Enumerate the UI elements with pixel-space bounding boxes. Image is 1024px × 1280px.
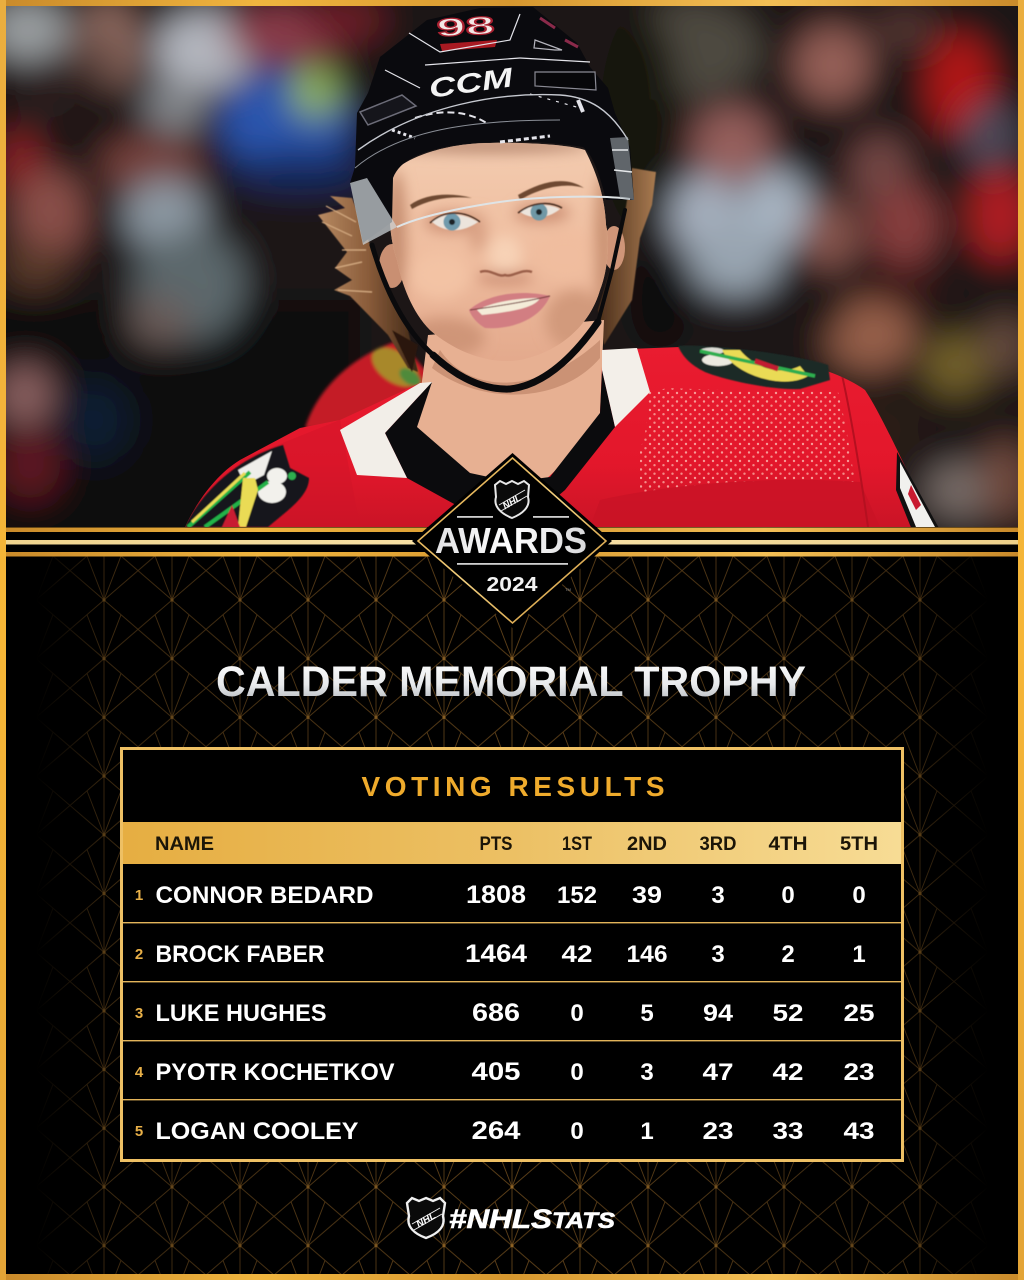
row 5: 0 (570, 1118, 584, 1145)
row 4: 47 (702, 1059, 734, 1086)
neck (417, 320, 604, 478)
row 5: 5 (135, 1123, 143, 1140)
table heading: VOTING RESULTS (362, 771, 664, 802)
header band: 1ST (562, 834, 592, 855)
photo: Connor Bedard in Blackhawks jersey (6, 6, 1018, 527)
hair (318, 168, 656, 372)
row 2: 1 (852, 941, 866, 968)
row 4: 23 (844, 1059, 874, 1086)
row 3: 3 (135, 1005, 143, 1022)
left ear and right ear (379, 226, 625, 288)
header band: 2ND (627, 834, 667, 855)
background player jersey (303, 340, 424, 428)
NHL Awards 2024 diamond badge: TM (565, 587, 571, 592)
left sleeve logo (185, 445, 309, 527)
row 3: 0 (570, 1000, 584, 1027)
facial features (410, 181, 584, 328)
row 5: 1 (640, 1118, 654, 1145)
row 4: 405 (472, 1058, 521, 1086)
header band: PTS (480, 834, 512, 855)
row 5: LOGAN COOLEY (156, 1118, 358, 1145)
header band: 3RD (700, 834, 736, 855)
row 3: LUKE HUGHES (156, 1000, 326, 1027)
CCM logo: CCM (427, 62, 515, 104)
mouth (469, 293, 550, 328)
row 1: 3 (711, 882, 725, 909)
row separators (123, 922, 901, 1100)
awards wordmark: AWARDS (435, 520, 587, 561)
row 5: 264 (472, 1117, 521, 1145)
header band (123, 822, 901, 864)
row 3: 5 (640, 1000, 654, 1027)
row 2: 2 (781, 941, 795, 968)
row 1: 152 (557, 882, 597, 909)
row 3: 25 (844, 1000, 874, 1027)
row 1: 39 (632, 882, 662, 909)
panel: voting results table (122, 748, 902, 1160)
right shoulder logo (678, 345, 830, 389)
row 3: 94 (703, 1000, 734, 1027)
row 1: 0 (781, 882, 795, 909)
row 4: 4 (135, 1064, 144, 1081)
year: 2024 (486, 574, 538, 596)
row 1: CONNOR BEDARD (156, 882, 374, 909)
row 4: 0 (570, 1059, 584, 1086)
nose (480, 271, 532, 276)
icon: NHL shield: NHL (501, 493, 524, 512)
footer: NHL logo and hashtag (407, 1198, 615, 1238)
row 1: 1 (135, 887, 143, 904)
row 3: 686 (472, 999, 520, 1027)
row 5: 33 (772, 1118, 804, 1145)
right sleeve stripe (896, 452, 940, 530)
row 4: PYOTR KOCHETKOV (156, 1059, 394, 1086)
vents (360, 95, 416, 125)
NHL Awards 2024 diamond badge (412, 453, 612, 628)
icon: NHL shield (407, 1198, 445, 1238)
row 2: 146 (626, 941, 668, 968)
row 4 (135, 1058, 874, 1086)
number 98: 98 (436, 12, 495, 43)
row 1: 1808 (466, 881, 526, 909)
row 4: 42 (772, 1059, 804, 1086)
white collar and black undershirt (340, 348, 650, 504)
hashtag: #NHLS TATS (449, 1204, 615, 1234)
red vent (440, 40, 497, 51)
row 3 (135, 999, 874, 1027)
row 2 (135, 940, 866, 968)
header band: 4TH (768, 834, 808, 855)
row 2: 1464 (465, 940, 527, 968)
face (390, 142, 608, 357)
row 4: 3 (640, 1059, 654, 1086)
eyes (432, 214, 478, 230)
header band: 5TH (840, 834, 878, 855)
helmet gloss (385, 14, 590, 142)
row 1: 0 (852, 882, 866, 909)
visor (350, 137, 634, 245)
row 3: 52 (772, 1000, 804, 1027)
eyebrows (410, 195, 472, 209)
icon: NHL shield (495, 481, 529, 518)
row 2: BROCK FABER (156, 941, 324, 968)
row 5 (135, 1117, 874, 1145)
icon: NHL shield: NHL (415, 1211, 438, 1230)
row 2: 2 (135, 946, 143, 963)
row 5: 23 (702, 1118, 734, 1145)
chin strap (372, 210, 625, 389)
row 5: 43 (844, 1118, 874, 1145)
blurred crowd background (6, 6, 1018, 527)
title: CALDER MEMORIAL TROPHY (216, 658, 806, 706)
art deco background pattern (6, 556, 1018, 1274)
header band: NAME (155, 834, 214, 855)
row 2: 42 (562, 941, 592, 968)
jersey (185, 347, 911, 527)
row 2: 3 (711, 941, 725, 968)
row 1 (135, 881, 866, 909)
triple gold divider stripes (6, 527, 1018, 556)
helmet (350, 7, 634, 243)
